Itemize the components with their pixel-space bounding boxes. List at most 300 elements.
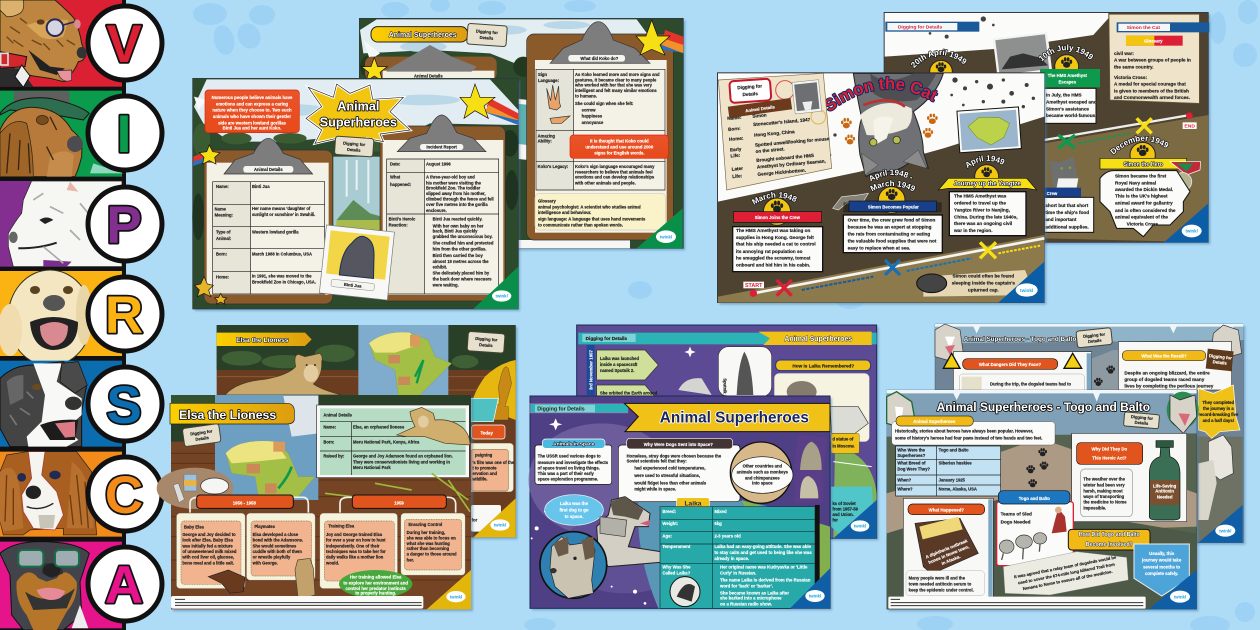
date: April 1948 to March 1949 bbox=[869, 168, 916, 214]
strip P: purple with white fluffy dog bbox=[0, 181, 122, 267]
newspaper: Togo and Balto: Teams of Sled bbox=[1001, 511, 1032, 516]
letter circle R: R bbox=[105, 286, 143, 345]
parchment text: Nenana to Nome to ensure all of the medicine. bbox=[1022, 569, 1113, 591]
icon: medicine bottle: Needed bbox=[1157, 494, 1173, 499]
clipboard: what did Koko do: researchers to believe that animals feel bbox=[575, 169, 653, 174]
text box: Simon's assistance bbox=[1046, 106, 1089, 111]
captain's cap note: upturned cap. bbox=[968, 288, 999, 293]
glossary card: Victoria Cross: bbox=[1114, 75, 1147, 80]
timeline marker yellow bbox=[1137, 118, 1152, 133]
card: Ensuring Control: what she was hunting bbox=[406, 541, 450, 546]
digging for details tag bbox=[467, 331, 505, 353]
digging for details tag bbox=[1076, 328, 1112, 348]
animal details table: Elsa, an orphaned lioness bbox=[353, 424, 405, 429]
captain's cap note: Simon could often be found bbox=[953, 274, 1014, 279]
title banner bbox=[217, 333, 312, 346]
year pill bbox=[190, 495, 308, 513]
glossary: to communicate rather than spoken words. bbox=[538, 222, 623, 227]
glossary card: Glossary bbox=[1144, 38, 1163, 43]
digging for details tag: Details bbox=[1088, 338, 1102, 344]
digging for details tag: Details bbox=[347, 147, 361, 153]
text box bbox=[1044, 88, 1097, 123]
text box bbox=[949, 192, 1026, 236]
text box: China. During the late 1940s, bbox=[954, 214, 1018, 219]
rocket bbox=[718, 347, 772, 398]
card: Why were dogs sent: were used to stressful situations, bbox=[633, 473, 700, 478]
heading: Laika: Laika bbox=[684, 501, 702, 508]
V.I.P.R.S.C.A. side strip bbox=[0, 0, 162, 630]
glossary card bbox=[1109, 14, 1209, 103]
title banner bbox=[371, 27, 468, 42]
clipboard: what did Koko do: intelligent and felt many similar emotions bbox=[575, 88, 657, 93]
data table: Temperament bbox=[662, 544, 691, 549]
card: Training Elsa: Joy and George trained Elsa bbox=[326, 532, 383, 537]
glossary card: the same country. bbox=[1114, 64, 1154, 69]
medal bbox=[1170, 162, 1201, 191]
shield note bbox=[1134, 544, 1189, 596]
card: Animals in Space bbox=[535, 439, 612, 484]
digging for details tag: Digging for bbox=[343, 141, 366, 147]
sheet: Laika (front) bbox=[528, 396, 832, 610]
sheet: Togo and Balto (front) bbox=[887, 390, 1199, 611]
data table: Why Was She bbox=[662, 565, 691, 570]
teal note: ks of Soviet bbox=[832, 501, 856, 506]
scalloped text box bbox=[1100, 171, 1190, 237]
clipboard: incident report: With her own baby on her bbox=[433, 223, 484, 228]
text box: Amethyst escaped and bbox=[1046, 100, 1097, 105]
title starburst: Animal bbox=[337, 100, 379, 114]
heading: Laika bbox=[677, 498, 709, 508]
text box: In July, the HMS bbox=[1046, 92, 1082, 97]
arrow: Sputnik: inside a spacecraft bbox=[600, 362, 638, 367]
animal details card: Brought onboard the HMS bbox=[756, 153, 814, 163]
end marker: END bbox=[1184, 124, 1195, 130]
letter circle R bbox=[88, 277, 162, 351]
top banners: Animal Superheroes bbox=[660, 410, 809, 427]
facts table: Togo and Balto bbox=[939, 447, 969, 452]
card: Training Elsa bbox=[320, 513, 397, 588]
clipboard: incident report: enclosure. bbox=[426, 208, 447, 213]
letter circle S: S bbox=[106, 376, 142, 435]
map of Africa bbox=[171, 395, 318, 507]
facts table: January 1925 bbox=[939, 477, 966, 482]
date: 20th April 1949: 20th April 1949 bbox=[910, 48, 968, 69]
text box: war in the region. bbox=[953, 228, 993, 233]
text box: its annoying rat population so bbox=[736, 249, 803, 254]
clipboard: animal details: Meaning: bbox=[215, 213, 233, 218]
map of China bbox=[957, 107, 1021, 153]
captain's cap note bbox=[917, 270, 1035, 297]
clipboard: what did Koko do: What did Koko do? bbox=[580, 56, 619, 61]
digging for details tag: Details bbox=[1212, 359, 1228, 366]
icon: medicine bottle: Antitoxin bbox=[1155, 489, 1174, 494]
parchment text: It was agreed that a relay team of dogsleds would be bbox=[1014, 554, 1117, 579]
glossary card: Simon the Cat bbox=[1127, 25, 1160, 31]
facts table: Superheroes? bbox=[897, 453, 926, 458]
timeline bbox=[743, 238, 1044, 297]
scalloped text box: Royal Navy animal bbox=[1115, 180, 1156, 185]
trophy on yellow shape bbox=[472, 360, 516, 420]
paw prints bbox=[1026, 448, 1048, 487]
clipboard: incident report: Reaction: bbox=[389, 223, 408, 228]
card: Animals in Space: This was a part of their early bbox=[538, 471, 594, 476]
clipboard: incident report: back, Binti Jua quickly bbox=[433, 229, 478, 234]
glossary card: A war between groups of people in bbox=[1114, 58, 1191, 63]
map of Africa bbox=[358, 325, 452, 397]
newspaper: Togo and Balto: Togo and Balto bbox=[1019, 496, 1050, 501]
clipboard: incident report: Date: bbox=[390, 161, 400, 166]
illustration: planet circle with speech: animals such as monkeys bbox=[737, 469, 789, 474]
clipboard: what did Koko do bbox=[527, 22, 673, 240]
notebook: why did they do: harsh, making most bbox=[1083, 488, 1123, 493]
clipboard: animal details: In 1991, she was moved to the bbox=[252, 274, 312, 279]
corner and logo bbox=[473, 267, 518, 309]
card: Why were dogs sent: Soviet scientists felt that they: bbox=[627, 459, 687, 464]
title banner: Animal Superheroes bbox=[389, 32, 457, 39]
cat photo bbox=[1049, 157, 1078, 188]
animal details card: Name: bbox=[727, 115, 742, 121]
date: April 1949 bbox=[966, 154, 1005, 190]
end marker bbox=[1183, 112, 1197, 130]
card: Why were dogs sent: Why Were Dogs Sent into Space? bbox=[644, 442, 713, 447]
card: Playmates: Playmates bbox=[254, 524, 276, 529]
card: Why were dogs sent: had experienced cold temperatures, bbox=[634, 465, 705, 470]
parchment text: used to cover the 674-mile long Iditarod Trail from bbox=[1017, 562, 1116, 585]
ribbon: Simon Joins the Crew: Simon Joins the Crew bbox=[755, 215, 801, 220]
yellow star note: They completed bbox=[1203, 400, 1235, 405]
digging for details tag: Details bbox=[479, 342, 494, 348]
clipboard: animal details: Name: bbox=[216, 184, 229, 189]
statue note bbox=[831, 433, 859, 453]
animal details card: Amethyst by Ordinary Seaman, bbox=[757, 159, 826, 170]
newspaper: Togo and Balto bbox=[997, 491, 1073, 566]
digging for details bar bbox=[885, 22, 979, 32]
letter circle C bbox=[88, 457, 162, 531]
card: campaigning: wildlife. bbox=[471, 477, 488, 482]
clipboard: animal details: Animal: bbox=[216, 236, 231, 241]
sheet: Simon timeline (back): twinkl bbox=[1186, 229, 1198, 234]
banner: Simon the Hero: Simon the Hero bbox=[1124, 162, 1164, 168]
clipboard: incident report: his mother were visiting the bbox=[426, 180, 482, 185]
clipboard: incident report: the back door where rescuers bbox=[433, 277, 492, 282]
clipboard: incident report: slipped away from his mother, bbox=[426, 191, 486, 196]
sheet: Laika remembered (back): twinkl bbox=[854, 524, 866, 529]
ribbon: Journey up the Yangtze bbox=[938, 178, 1037, 190]
data table: Curly' in Russian. bbox=[720, 571, 756, 576]
worksheet set: Elsa the Lioness bbox=[157, 325, 518, 611]
scalloped text box: Simon became the first bbox=[1115, 173, 1167, 178]
scalloped text box: and is often considered the bbox=[1115, 208, 1176, 213]
card: Ensuring Control: Ensuring Control bbox=[408, 522, 442, 527]
teal note: and Union. bbox=[832, 512, 854, 517]
shoe/boot illustration bbox=[208, 570, 245, 593]
newspaper: Togo and Balto: Dogs Needed bbox=[1001, 519, 1031, 524]
scalloped text box: animal equivalent of the bbox=[1115, 215, 1168, 220]
letter circle A bbox=[88, 547, 162, 621]
digging for details tag bbox=[1206, 349, 1234, 371]
top heading: Animal Superheroes bbox=[784, 336, 852, 343]
sheet: Binti Jua (front) bbox=[192, 78, 520, 311]
card: Playmates: with George. bbox=[252, 560, 278, 565]
card: Training Elsa: techniques was to take her for bbox=[326, 549, 386, 554]
rocket: Sputnik 2 bbox=[722, 378, 727, 398]
animal details card bbox=[718, 73, 833, 190]
card: Animals in Space: Animals in Space bbox=[553, 442, 595, 448]
ribbon: Simon Becomes Popular bbox=[843, 201, 942, 212]
data table: The name Laika is derived from the Russian bbox=[720, 578, 811, 583]
sheet: Simon timeline (back) bbox=[884, 12, 1212, 246]
glossary card: and Commonwealth armed forces. bbox=[1114, 95, 1190, 100]
clipboard: what did Koko do: Amazing bbox=[538, 133, 555, 138]
green oval callout: control her predator instincts bbox=[345, 586, 406, 591]
corner and logo bbox=[637, 208, 683, 248]
card: Animals in Space: space exploration programme. bbox=[538, 477, 598, 482]
digging for details tag: Digging for bbox=[190, 428, 213, 437]
clipboard: what did Koko do: who worked with her that she was very bbox=[574, 83, 653, 88]
animal details table: Name: bbox=[323, 424, 336, 429]
notebook: dangers: During the trip, the dogsled teams had to bbox=[990, 382, 1072, 387]
text box: The HMS Amethyst was bbox=[954, 194, 1007, 199]
digging for details tag: Digging for bbox=[476, 29, 498, 35]
animal details table: George and Joy Adamson found an orphaned lion. bbox=[353, 453, 453, 458]
text box: time the ship's food bbox=[1045, 210, 1089, 215]
glossary card: A medal for special courage that bbox=[1114, 82, 1186, 87]
callout: 2000 signs bbox=[570, 135, 668, 158]
data table: she barked into a microphone bbox=[720, 596, 782, 601]
callout: red intro box: animals who have shown their gentler bbox=[213, 114, 291, 119]
strip A: pink with rottweiler in glasses bbox=[0, 542, 122, 630]
illustration: grey and white cat bbox=[853, 73, 943, 177]
callout: 2000 signs: signs for English words. bbox=[594, 150, 644, 155]
banner: Simon the Hero bbox=[1100, 158, 1187, 169]
text box: Over time, the crew grew fond of Simon bbox=[848, 218, 936, 223]
title text: Animal Superheroes - Togo and Balto bbox=[964, 336, 1077, 343]
card: Ensuring Control: she was able to focus on bbox=[407, 535, 456, 540]
text box: ordered to travel up the bbox=[954, 200, 1006, 205]
clipboard: what did Koko do: She could sign when she felt: bbox=[575, 101, 633, 106]
notebook: why did they do: the medicine to Nome bbox=[1083, 500, 1127, 505]
card: Training Elsa: daily walks like a mother lion bbox=[326, 555, 384, 560]
animal details table bbox=[317, 405, 470, 478]
clipboard: animal details: Binti Jua bbox=[252, 184, 270, 189]
footer glossary bbox=[171, 596, 423, 609]
text box: and important bbox=[1045, 217, 1077, 222]
data table: She became known as Laika after bbox=[720, 590, 789, 595]
clipboard: incident report: happened: bbox=[390, 182, 411, 187]
sheet: Laika (front): twinkl bbox=[809, 594, 821, 599]
card: Playmates: Elsa developed a close bbox=[253, 532, 299, 537]
data table: Age: bbox=[662, 533, 673, 538]
intro card bbox=[892, 416, 1055, 445]
yellow star note bbox=[1198, 385, 1240, 438]
heading: how did they become involved: How Did Togo and Balto bbox=[1079, 532, 1141, 538]
strip C: orange with cavalier spaniel bbox=[0, 452, 122, 537]
clipboard: incident report: Incident Report bbox=[426, 145, 458, 150]
title: Animal Superheroes - Togo and Balto bbox=[937, 400, 1150, 414]
speech cloud bbox=[545, 495, 603, 525]
yellow star note: record-breaking five bbox=[1198, 412, 1239, 417]
clipboard: animal details: Home: bbox=[216, 274, 229, 279]
card: Baby Elsa: Baby Elsa bbox=[184, 524, 205, 529]
worksheet set: Togo and Balto bbox=[887, 324, 1245, 611]
notebook: what happened: Many people were ill and the bbox=[909, 575, 966, 580]
animal details card: Details bbox=[742, 91, 758, 97]
sheet: What did Koko do (back): twinkl bbox=[660, 234, 672, 239]
letter circle V: V bbox=[106, 15, 142, 74]
clipboard: incident report: A three-year-old boy and bbox=[426, 174, 475, 179]
text box: the valuable food supplies that were not bbox=[848, 238, 937, 243]
arrow: orbit bbox=[597, 385, 658, 397]
year pill: 1959 bbox=[394, 500, 404, 505]
text box: the rats from contaminating or eating bbox=[848, 232, 930, 237]
animal details table: Meru National Park bbox=[353, 465, 391, 470]
sheet: What did Koko do (back) bbox=[359, 18, 685, 250]
card: Ensuring Control: a danger to those around bbox=[407, 552, 457, 557]
animal details card: Early bbox=[730, 147, 742, 153]
digging for details tag: Digging for bbox=[475, 336, 498, 342]
icon: treasure box with note: hones in Nome town, bbox=[928, 544, 970, 565]
clipboard: incident report: almost 18 metres across the bbox=[433, 259, 489, 264]
glossary card: civil war: bbox=[1114, 51, 1134, 56]
data table: Her original name was Kudryavka or 'Little bbox=[720, 565, 808, 570]
notebook: result bbox=[1118, 342, 1232, 390]
digging for details tag: Digging for bbox=[1131, 414, 1154, 421]
card: Ensuring Control: During her training, bbox=[407, 530, 445, 535]
facts table: Who Were the bbox=[897, 447, 926, 452]
glossary: animal psychologist: A scientist who studies animal bbox=[538, 205, 641, 210]
green oval callout: Her training allowed Elsa bbox=[350, 574, 402, 579]
icon: medicine bottle bbox=[1149, 441, 1180, 520]
heading: today: Today bbox=[480, 430, 493, 435]
lion cub bbox=[295, 558, 315, 600]
title: Simon the Cat: Simon the Cat bbox=[826, 76, 938, 112]
card: campaigning: ervation and bbox=[472, 471, 498, 476]
green heading: The HMS Amethyst bbox=[1048, 73, 1088, 78]
date: April 1949: April 1949 bbox=[966, 154, 1005, 169]
animal details card: Digging for bbox=[737, 83, 762, 90]
text box: The HMS Amethyst was taking on bbox=[736, 228, 810, 233]
sheet: Binti Jua (front): twinkl bbox=[496, 294, 508, 299]
card: Training Elsa: for over a year on how to hunt bbox=[326, 538, 386, 543]
heading: How is Laika remembered bbox=[776, 360, 871, 371]
digging for details tag: Details bbox=[195, 435, 210, 442]
title banner: Elsa the Lioness bbox=[236, 337, 289, 344]
heading: today bbox=[472, 425, 505, 439]
callout: red intro box: emotions and can express a caring bbox=[216, 101, 288, 106]
facts table bbox=[896, 446, 1001, 496]
notebook: why did they do: This Heroic Act? bbox=[1092, 455, 1127, 460]
notebook: result: Despite an ongoing blizzard, the entire bbox=[1124, 370, 1210, 375]
teal callout bbox=[471, 398, 498, 422]
notebook: why did they do: Why Did They Do bbox=[1092, 447, 1127, 452]
teal note: for bbox=[832, 518, 838, 523]
letter circle S bbox=[88, 367, 162, 441]
digging for details bar: Digging for Details bbox=[898, 24, 942, 30]
corner and logo bbox=[998, 262, 1044, 303]
clipboard: incident report: climbed through the fence and fell bbox=[426, 197, 494, 202]
animal details card: Home: bbox=[729, 136, 744, 142]
timeline: START bbox=[745, 283, 763, 289]
animal details card: Life: bbox=[732, 173, 743, 179]
letter circle P bbox=[88, 187, 162, 261]
captain's cap note: sleeping inside the captain's bbox=[952, 281, 1015, 286]
clipboard: incident report bbox=[380, 115, 505, 301]
arrow: Sputnik bbox=[597, 350, 658, 380]
digging for details tag bbox=[1123, 412, 1160, 429]
sheet: Togo and Balto results (back) bbox=[935, 324, 1245, 545]
glossary: intelligence and behaviour. bbox=[538, 210, 591, 215]
facts table: When? bbox=[897, 477, 912, 482]
card: Ensuring Control: her. bbox=[407, 557, 414, 562]
icon: signing hand bbox=[547, 85, 570, 123]
notebook: dangers: What Dangers Did They Face? bbox=[979, 362, 1041, 367]
waterfall bbox=[333, 157, 382, 230]
animal details card: Born: bbox=[728, 126, 741, 132]
card: campaigning: 's film was one of the bbox=[472, 460, 515, 465]
arrow: Sputnik: Laika was launched bbox=[600, 356, 639, 361]
card: campaigning: t to promote bbox=[472, 465, 497, 470]
card: Training Elsa: independently. One of their bbox=[326, 543, 380, 548]
speech cloud: first dog to go bbox=[559, 507, 589, 512]
data table: Laika had an easy-going attitude. She was able bbox=[714, 544, 812, 549]
data table: Called Laika? bbox=[662, 571, 691, 576]
card: Baby Elsa: look after Elsa. Baby Elsa bbox=[182, 538, 234, 543]
heading: how did they become involved bbox=[1068, 529, 1150, 550]
notebook: why did they do: impossible. bbox=[1083, 505, 1106, 510]
ship photo bbox=[993, 32, 1052, 78]
glossary: Glossary bbox=[538, 198, 556, 203]
worksheet set: Simon the Cat bbox=[717, 12, 1212, 306]
animal details table: They were conservationists living and working in bbox=[353, 459, 450, 464]
animal details table: Born: bbox=[323, 439, 334, 444]
text box bbox=[733, 227, 823, 272]
text box: there was an ongoing civil bbox=[954, 221, 1012, 226]
heading: How is Laika remembered: How is Laika Remembered? bbox=[792, 363, 854, 368]
clipboard: what did Koko do: annoyance bbox=[582, 120, 604, 125]
husky head left bbox=[935, 324, 963, 360]
clipboard: animal details: sunlight or sunshine' in Swahili. bbox=[252, 212, 315, 217]
card: Why were dogs sent: might while in space. bbox=[634, 487, 676, 492]
text box: additional supplies. bbox=[1045, 224, 1089, 229]
animal details card: Later bbox=[731, 166, 743, 172]
data table: on a Russian radio show. bbox=[720, 601, 772, 606]
card: campaigning: paigning bbox=[475, 453, 493, 458]
clipboard: incident report: Binti then carried the boy bbox=[433, 253, 483, 258]
animal details card: Hong Kong, China bbox=[754, 129, 795, 138]
polaroid: Binti Jua: Binti Jua bbox=[344, 282, 362, 289]
clipboard: animal details: March 1988 in Columbus, USA bbox=[252, 251, 312, 256]
illustration: planet circle with speech: Other countries and bbox=[743, 463, 783, 468]
clipboard: incident report: Binti's Heroic bbox=[389, 217, 416, 222]
card: Playmates: bond with the Adamsons. bbox=[253, 538, 303, 543]
star bbox=[684, 347, 696, 357]
text box: Yangtze River to Nanjing, bbox=[954, 207, 1010, 212]
animal details card: Animal Details bbox=[745, 104, 776, 113]
callout: red intro box: nature when they choose to. Two such bbox=[212, 108, 292, 113]
arrow: Sputnik: named Sputnik 2. bbox=[600, 368, 634, 373]
worksheet set: Koko and Binti Jua (gorillas) bbox=[192, 18, 685, 311]
clipboard: incident report: She delicately placed him by bbox=[433, 271, 490, 276]
stars bottom left bbox=[195, 277, 227, 304]
text box: that his ship needed a cat to control bbox=[736, 242, 816, 247]
year pill bbox=[340, 495, 456, 513]
intro card: Animal Superheroes bbox=[913, 419, 956, 424]
digging for details tag bbox=[467, 23, 507, 47]
green oval callout: to explore her environment and bbox=[343, 580, 408, 585]
clipboard: what did Koko do: emotions and can develop relationships bbox=[575, 175, 655, 180]
heading: how did they become involved: Become Involved? bbox=[1086, 542, 1133, 548]
clipboard: what did Koko do: As Koko learned more and more signs and bbox=[575, 72, 660, 77]
